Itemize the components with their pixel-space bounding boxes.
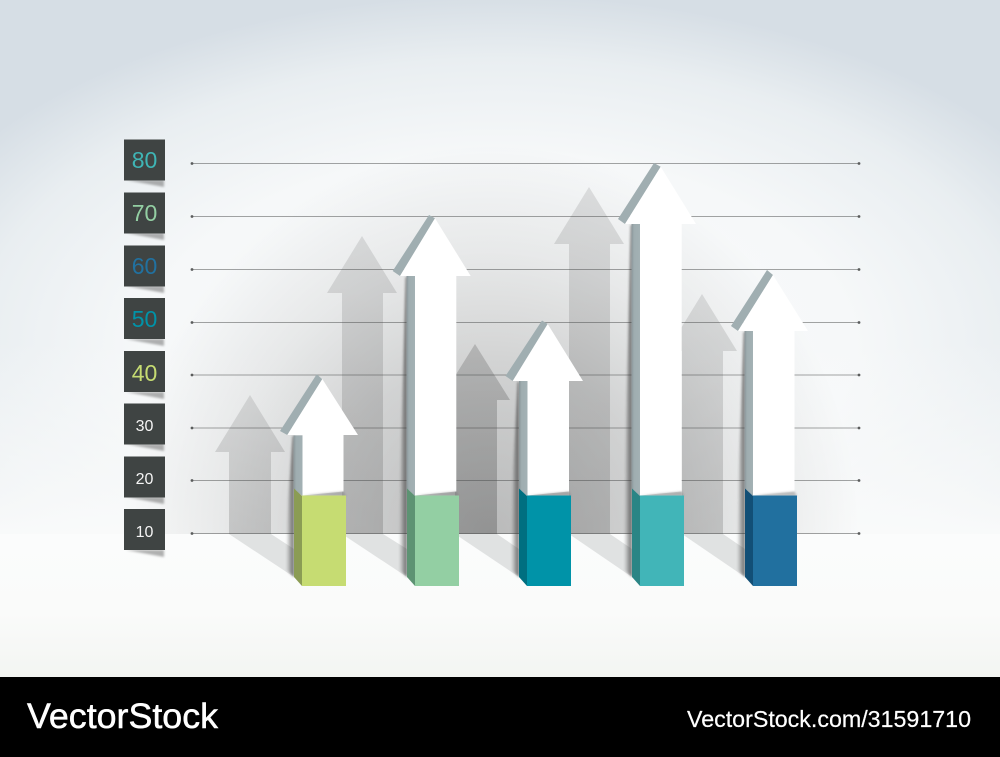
footer bar [0,677,1000,757]
label 50: 50 [132,306,157,332]
floor shadows of the arrows [229,534,745,577]
label boxes [124,140,165,550]
arrow column 4: turquoise [618,163,696,586]
y-axis labels [124,140,165,557]
label shadows [126,180,164,557]
floor [0,534,1000,677]
label 30: 30 [136,418,154,435]
arrow column 5: blue [731,270,808,586]
arrow column 3: teal [506,320,583,586]
grid lines [191,162,860,535]
label 40: 40 [132,360,157,386]
label 20: 20 [136,471,154,488]
footer logo: VectorStock [27,697,219,736]
label 10: 10 [136,524,154,541]
arrow column 2: green [393,215,471,586]
wall shading behind arrows [100,130,880,534]
wall fade toward floor [0,340,1000,534]
arrow column 1: lime [280,374,358,586]
footer image id: VectorStock.com/31591710 [687,706,971,732]
background wall [0,0,1000,534]
label 60: 60 [132,253,157,279]
label 70: 70 [132,200,157,226]
background shadow arrows [215,187,737,534]
label 80: 80 [132,147,157,173]
